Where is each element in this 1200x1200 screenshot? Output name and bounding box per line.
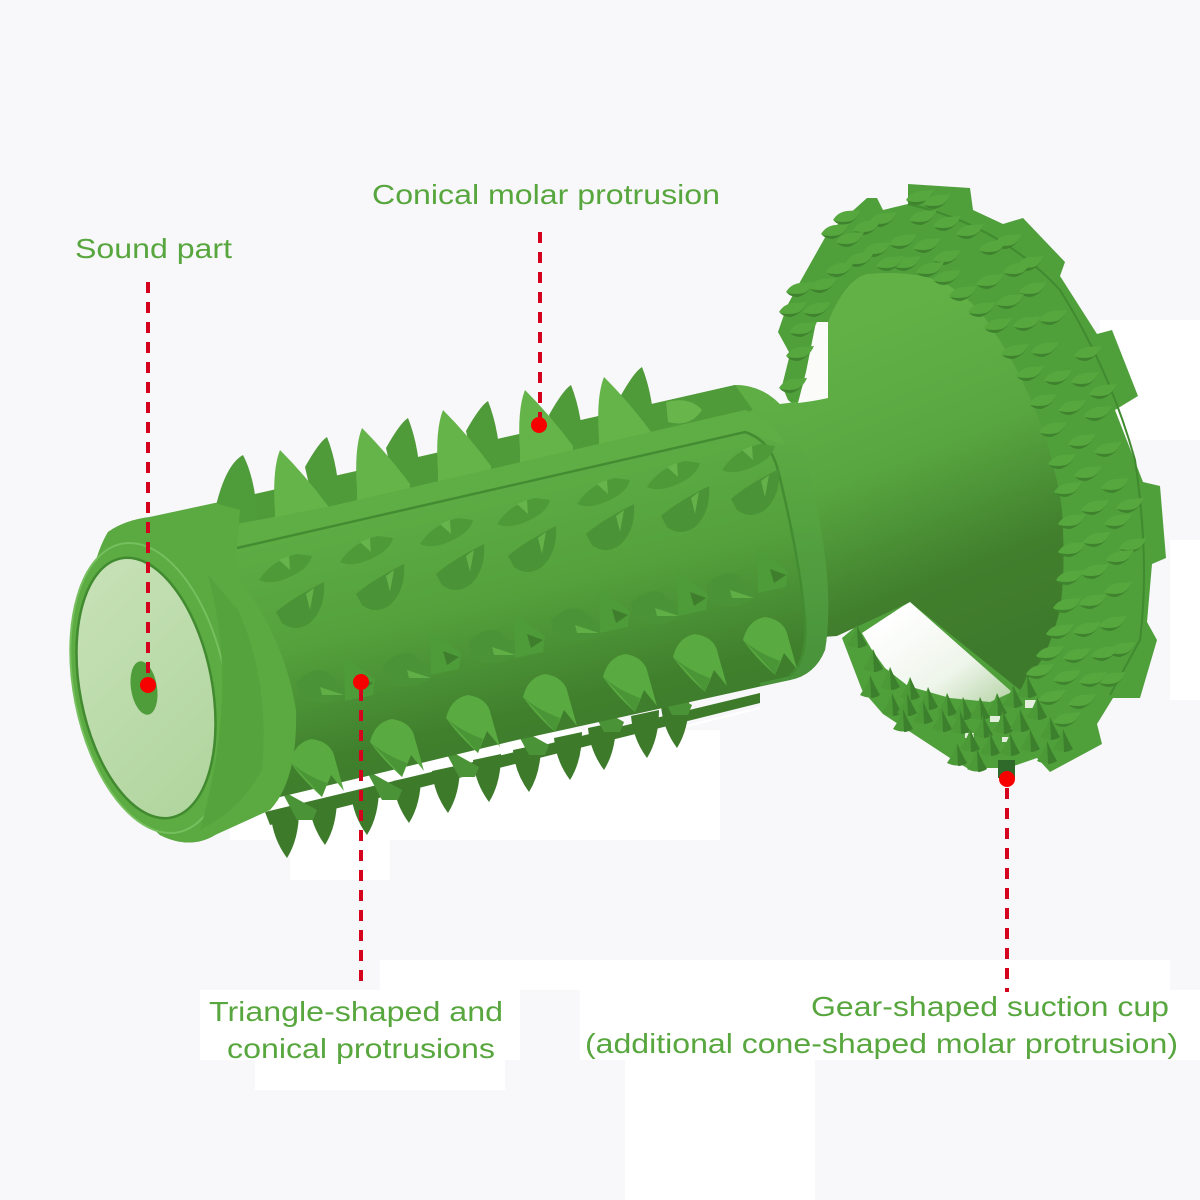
suction cup disc: [778, 184, 1166, 778]
label: triangle-shaped and conical protrusions: [209, 996, 503, 1064]
leader: gear-shaped suction cup: [999, 771, 1015, 992]
background patches: [200, 320, 1200, 1200]
barrel body: [85, 385, 828, 842]
sound hole: [127, 659, 161, 717]
cap band: [85, 503, 296, 842]
back wall: [215, 385, 765, 535]
cap band shade: [200, 575, 264, 830]
label: conical molar protrusion: Conical molar protrusion: [372, 179, 720, 210]
leader: triangle and conical protrusions: [353, 674, 369, 986]
product: dog chew toy: [47, 184, 1166, 858]
panel protrusions: [259, 444, 797, 797]
label: gear-shaped suction cup: [585, 991, 1178, 1059]
label: triangle-shaped and conical protrusions: Triangle-shaped and: [209, 996, 503, 1027]
label: gear-shaped suction cup: (additional cone-shaped molar protrusion): [585, 1028, 1178, 1059]
end cap face: [56, 546, 236, 830]
label: triangle-shaped and conical protrusions: conical protrusions: [227, 1033, 495, 1064]
label: gear-shaped suction cup: Gear-shaped suction cup: [811, 991, 1169, 1022]
barrel rib highlight: [215, 410, 785, 548]
rim edge: [908, 204, 1144, 695]
barrel flange near neck: [735, 385, 828, 686]
leader: sound part: [140, 282, 156, 693]
top spikes: [215, 367, 765, 535]
recessed panel: [235, 432, 805, 790]
gear outline: [778, 184, 1166, 772]
lower holes: [965, 700, 1037, 742]
flared neck: [780, 273, 1064, 690]
upper gap: [798, 322, 828, 403]
molar cones on ring: [779, 190, 1147, 772]
underside spikes: [265, 685, 760, 858]
dark tab at bottom of disc: [998, 760, 1015, 778]
lower gap: [862, 602, 1012, 702]
label: sound part: Sound part: [75, 233, 232, 264]
cap outer ring: [47, 529, 253, 847]
panel edge: [237, 432, 805, 676]
leader: conical molar protrusion: [531, 232, 547, 433]
